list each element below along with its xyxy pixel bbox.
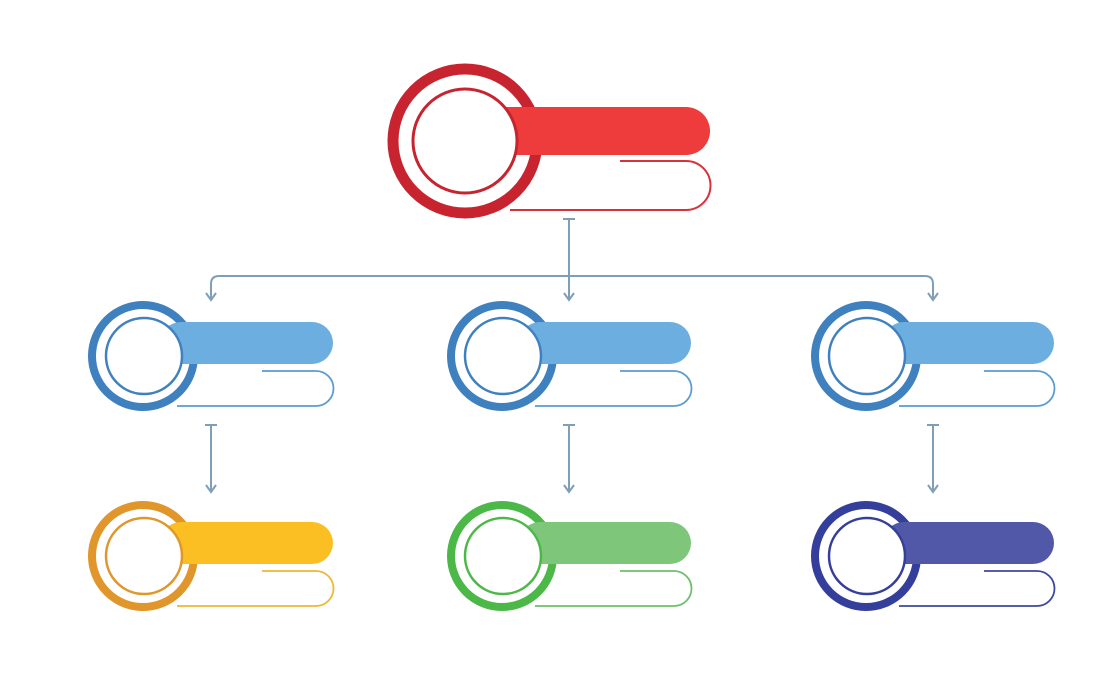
arrow: middle column — [563, 425, 575, 492]
node: blue middle — [451, 305, 692, 407]
node: orange — [92, 505, 334, 607]
arrow: horizontal branch — [206, 276, 938, 300]
connectors — [205, 219, 939, 492]
node: blue right — [815, 305, 1054, 407]
arrow: right column — [927, 425, 939, 492]
node: blue left — [92, 305, 334, 407]
node: green — [451, 505, 692, 607]
node: top red — [393, 69, 710, 213]
node: navy — [815, 505, 1054, 607]
arrow: top to middle — [563, 219, 575, 300]
arrow: left column — [205, 425, 217, 492]
